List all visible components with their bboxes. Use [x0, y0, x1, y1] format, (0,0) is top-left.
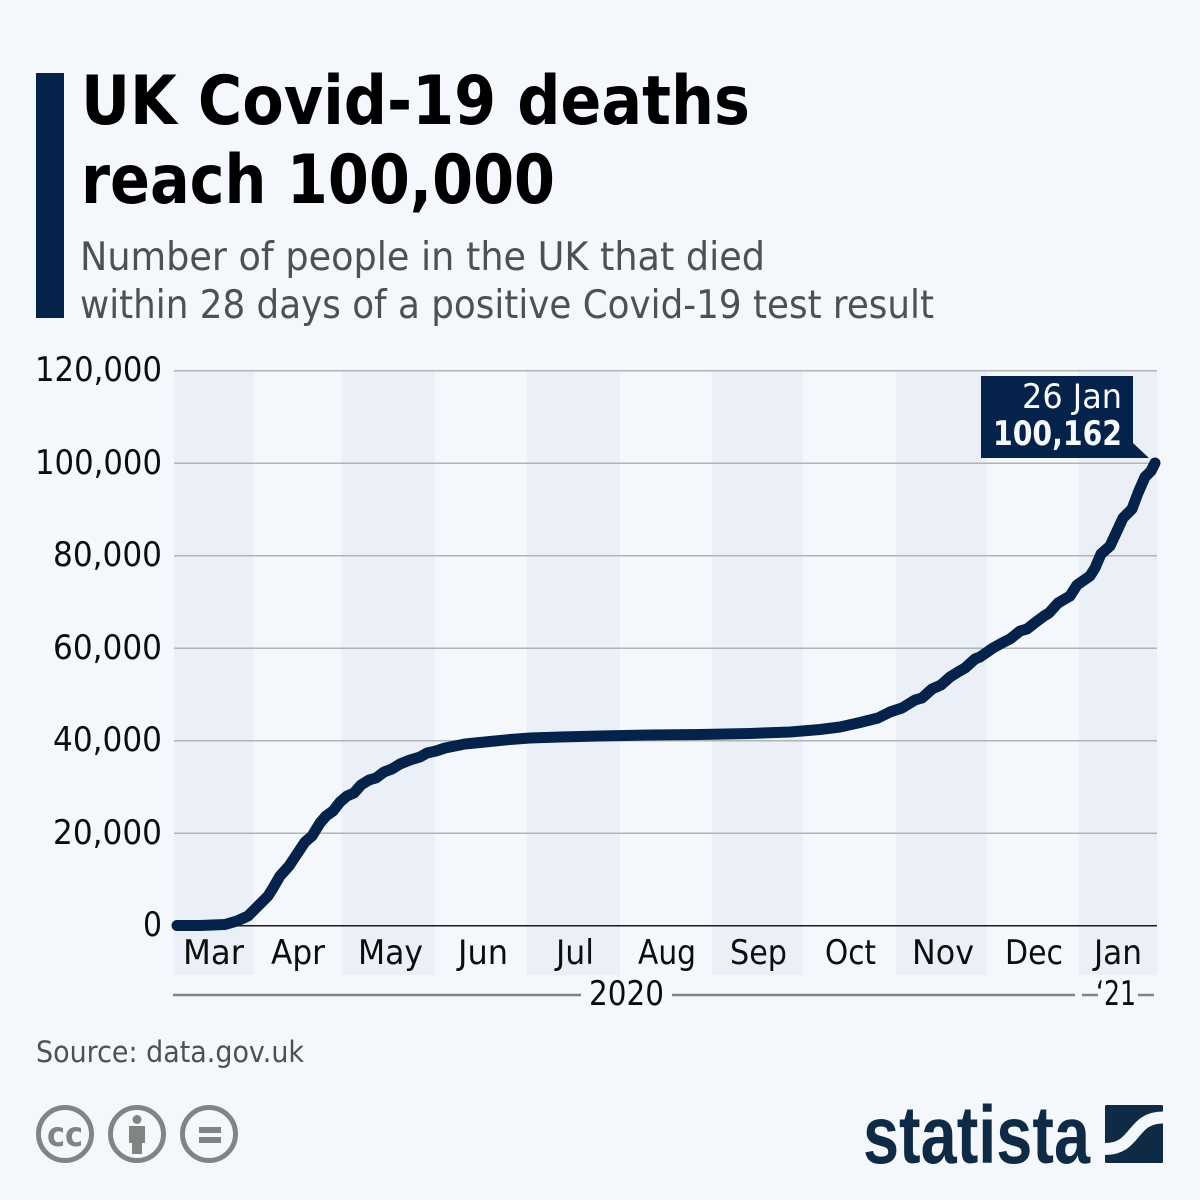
- x axis month labels: Sep: [730, 933, 787, 973]
- x axis month labels: Oct: [825, 933, 876, 973]
- icon: creative commons: cc: [47, 1115, 83, 1155]
- statista logo: statista: [863, 1090, 1091, 1181]
- title: UK Covid-19 deaths: [81, 62, 750, 141]
- y axis labels: 20,000: [53, 813, 162, 853]
- source: Source: data.gov.uk: [36, 1035, 304, 1069]
- callout: 26 Jan 100,162: 100,162: [993, 414, 1122, 454]
- callout: 26 Jan 100,162: 26 Jan: [1022, 377, 1122, 417]
- icon: no derivatives: [182, 1108, 236, 1160]
- x axis month labels: Apr: [271, 933, 325, 973]
- year axis: ‘21: [1096, 974, 1136, 1014]
- y axis labels: 100,000: [35, 443, 162, 483]
- x axis month labels: Nov: [912, 933, 974, 973]
- title: reach 100,000: [81, 141, 555, 220]
- x axis month labels: Jul: [554, 933, 594, 973]
- x axis month labels: May: [358, 933, 423, 973]
- y axis labels: 0: [143, 905, 162, 945]
- y axis labels: 60,000: [53, 628, 162, 668]
- y axis labels: 80,000: [53, 535, 162, 575]
- icon: statista mark: [1105, 1105, 1163, 1163]
- subtitle: Number of people in the UK that died: [80, 235, 765, 280]
- icon: creative commons: [38, 1108, 92, 1160]
- line chart: [35, 350, 1157, 1014]
- x axis month labels: Jun: [456, 933, 508, 973]
- data line: cumulative deaths: [177, 463, 1155, 926]
- y axis labels: [35, 350, 162, 945]
- subtitle: within 28 days of a positive Covid-19 test result: [80, 283, 934, 328]
- year axis: 2020: [589, 974, 664, 1014]
- x axis month labels: Aug: [638, 933, 696, 973]
- icon: attribution: [110, 1108, 164, 1160]
- y axis labels: 40,000: [53, 720, 162, 760]
- x axis month labels: Jan: [1092, 933, 1142, 973]
- subtitle: [80, 235, 934, 328]
- month bands: [174, 370, 1157, 975]
- callout: 26 Jan 100,162: [981, 376, 1149, 458]
- y axis labels: 120,000: [35, 350, 162, 390]
- title accent bar: [36, 73, 64, 318]
- x axis month labels: Dec: [1005, 933, 1063, 973]
- year axis: [173, 974, 1154, 1014]
- title: [81, 62, 750, 220]
- x axis month labels: Mar: [183, 933, 244, 973]
- x axis month labels: [183, 933, 1142, 973]
